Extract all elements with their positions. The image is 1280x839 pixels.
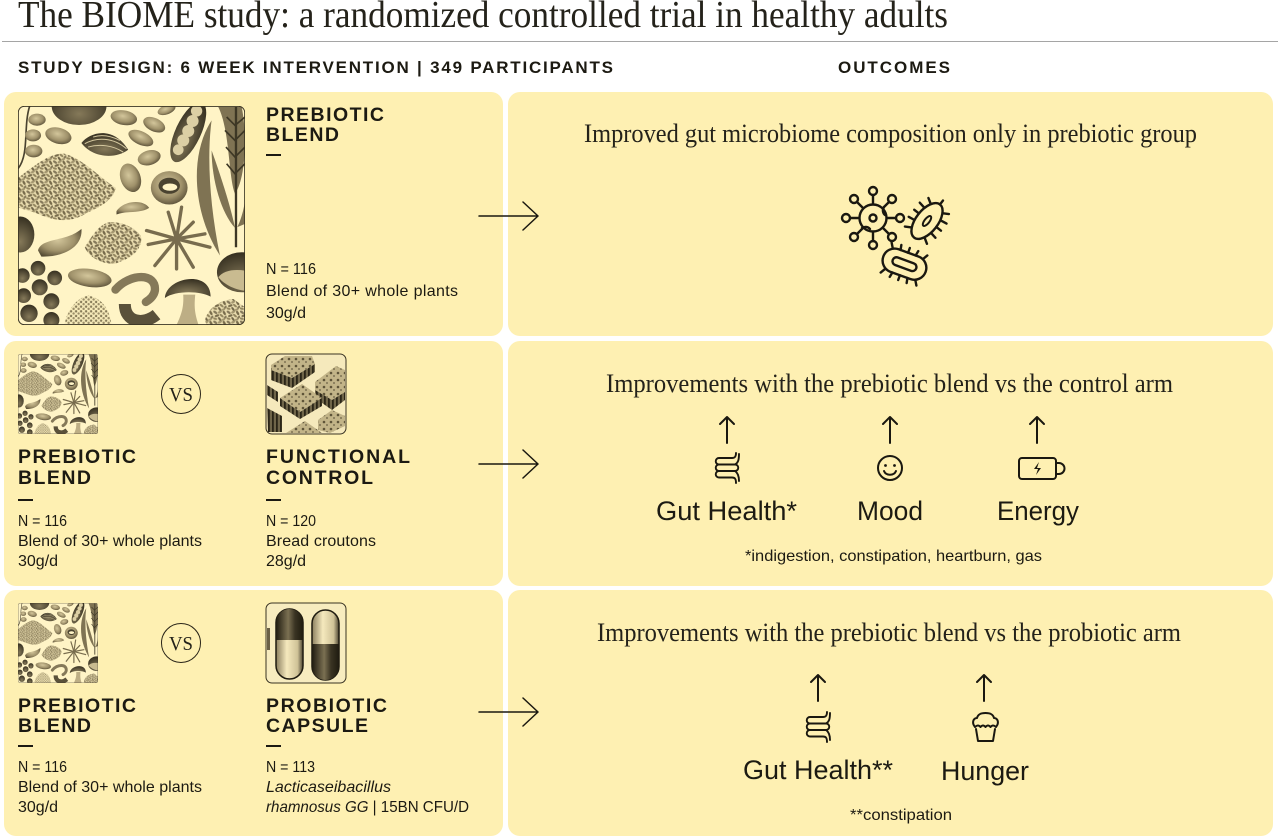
details: probiotic capsule: Lacticaseibacillus — [266, 779, 391, 796]
panel: prebiotic vs probiotic capsule — [4, 590, 503, 836]
details: prebiotic blend: 30g/d — [266, 305, 306, 322]
arrow: row one — [479, 202, 538, 230]
thumbnail: bread croutons — [266, 354, 346, 434]
outcome: gut health: Gut Health* — [656, 496, 797, 526]
thumbnail: prebiotic blend — [14, 596, 106, 684]
arrow: row three — [479, 698, 538, 726]
heading: functional control: FUNCTIONAL — [266, 446, 410, 468]
thumbnail: prebiotic blend — [14, 347, 106, 435]
details: probiotic capsule: N = 113 — [266, 759, 315, 776]
details: functional control: N = 120 — [266, 513, 316, 530]
details: prebiotic blend: N = 116 — [18, 513, 67, 530]
heading: probiotic capsule: CAPSULE — [266, 715, 368, 737]
icon: microbes — [842, 187, 956, 288]
outcome: gut health — [743, 675, 893, 785]
thumbnail: probiotic capsules — [266, 603, 346, 683]
illustration: whole plant foods — [6, 88, 266, 328]
panel: probiotic arm outcomes — [508, 590, 1273, 836]
outcome: gut health — [656, 417, 797, 526]
heading: prebiotic blend: PREBIOTIC — [18, 446, 136, 468]
outcome: hunger — [941, 675, 1029, 786]
footnote: **constipation — [850, 807, 952, 824]
heading: prebiotic blend: BLEND — [18, 467, 91, 489]
outcome: energy: Energy — [997, 496, 1079, 526]
heading: prebiotic blend: PREBIOTIC — [266, 104, 384, 126]
details: prebiotic blend: 30g/d — [18, 553, 58, 570]
badge: versus: VS — [169, 633, 193, 655]
heading: outcomes: OUTCOMES — [838, 58, 950, 77]
outcome: energy — [997, 417, 1079, 526]
details: prebiotic blend: N = 116 — [18, 759, 67, 776]
details: functional control: Bread croutons — [266, 533, 376, 550]
panel: control arm outcomes — [508, 341, 1273, 586]
heading: probiotic capsule: PROBIOTIC — [266, 695, 387, 717]
details: prebiotic blend: Blend of 30+ whole plants — [18, 533, 202, 550]
details: prebiotic blend: Blend of 30+ whole plants — [266, 283, 458, 300]
arrow: row two — [479, 450, 538, 478]
heading: prebiotic blend: BLEND — [266, 124, 339, 146]
outcome: hunger: Hunger — [941, 756, 1029, 786]
footnote: *indigestion, constipation, heartburn, gas — [745, 548, 1042, 565]
outcome: gut health: Gut Health** — [743, 755, 893, 785]
heading: functional control: CONTROL — [266, 467, 373, 489]
outcome heading: Improvements with the prebiotic blend vs the probiotic arm — [597, 618, 1181, 647]
outcome heading: Improved gut microbiome composition only in prebiotic group — [584, 119, 1197, 148]
details: prebiotic blend: Blend of 30+ whole plants — [18, 779, 202, 796]
badge: versus — [162, 624, 200, 662]
details: probiotic capsule: rhamnosus GG | 15BN CFU/D — [266, 799, 475, 816]
outcome: mood — [857, 417, 923, 526]
panel: prebiotic vs functional control — [4, 341, 503, 586]
heading: prebiotic blend: PREBIOTIC — [18, 695, 136, 717]
details: prebiotic blend: N = 116 — [266, 261, 316, 278]
panel: composition outcome — [508, 92, 1273, 336]
panel: prebiotic blend arm — [4, 88, 503, 336]
badge: versus: VS — [169, 384, 193, 406]
heading: study design: STUDY DESIGN: 6 WEEK INTERVENTION | 349 PARTICIPANTS — [18, 58, 613, 77]
badge: versus — [162, 374, 200, 414]
details: functional control: 28g/d — [266, 553, 306, 570]
outcome heading: Improvements with the prebiotic blend vs the control arm — [606, 369, 1173, 398]
outcome: mood: Mood — [857, 496, 923, 526]
details: prebiotic blend: 30g/d — [18, 799, 58, 816]
heading: prebiotic blend: BLEND — [18, 715, 91, 737]
